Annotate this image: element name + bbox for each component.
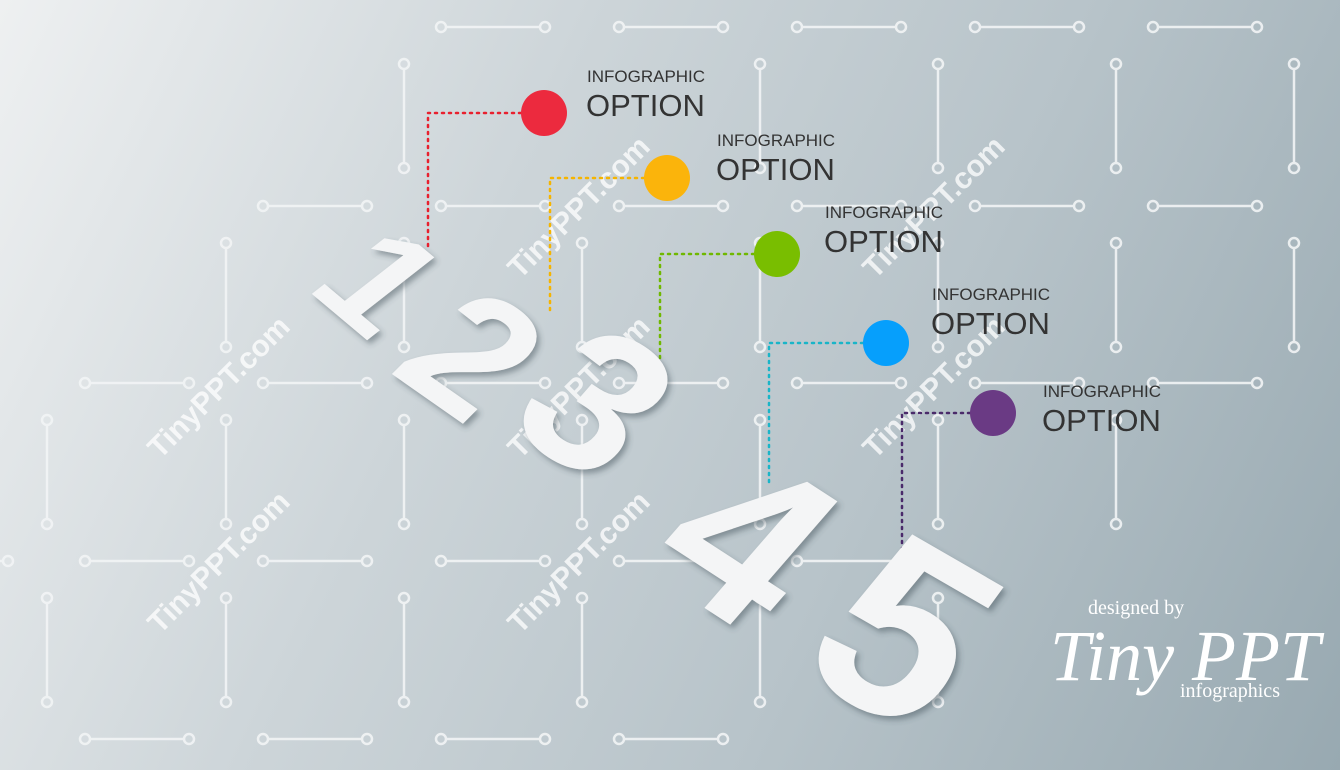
option labels: OPTION [1042,403,1161,438]
option labels: OPTION [824,224,943,259]
option labels: INFOGRAPHIC [932,285,1050,304]
option labels [586,67,1161,438]
logo: infographics [1180,680,1280,702]
option labels: OPTION [586,88,705,123]
option labels: OPTION [716,152,835,187]
option labels: INFOGRAPHIC [587,67,705,86]
option labels: INFOGRAPHIC [1043,382,1161,401]
numbers 1-5: 4 [606,404,890,676]
watermarks: TinyPPT.com [502,485,657,640]
option labels: OPTION [931,306,1050,341]
watermarks: TinyPPT.com [502,310,657,465]
numbers 1-5 [277,200,1050,770]
watermarks: TinyPPT.com [142,310,297,465]
logo: designed by [1088,597,1184,619]
numbers 1-5: 1 [277,200,483,364]
dotted connectors [428,113,970,565]
watermarks: TinyPPT.com [502,130,657,285]
option labels: INFOGRAPHIC [717,131,835,150]
watermarks [142,130,1012,640]
option circles [521,90,1016,436]
watermarks: TinyPPT.com [142,485,297,640]
option labels: INFOGRAPHIC [825,203,943,222]
numbers 1-5: 2 [359,254,585,456]
watermarks: TinyPPT.com [857,130,1012,285]
numbers 1-5: 3 [473,284,721,520]
logo: Tiny PPT [1050,616,1325,696]
watermarks: TinyPPT.com [857,310,1012,465]
